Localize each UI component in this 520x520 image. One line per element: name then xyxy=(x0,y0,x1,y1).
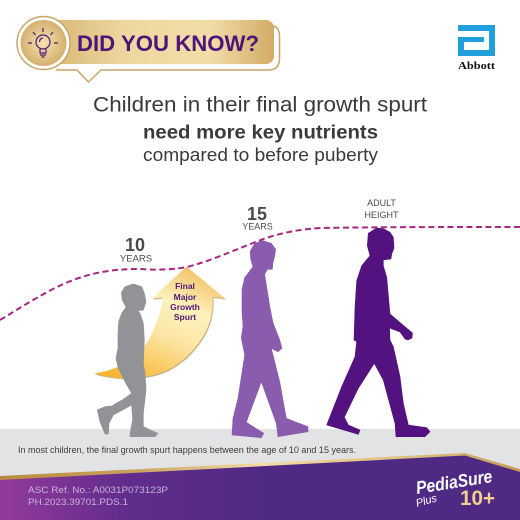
label: 15 years: YEARS xyxy=(242,222,273,232)
logo: Abbott xyxy=(458,25,496,72)
title line 3: compared to before puberty xyxy=(143,145,378,165)
arrow label xyxy=(170,281,200,322)
label: 10 years xyxy=(120,235,152,264)
label: 15 years xyxy=(242,204,273,232)
ground band xyxy=(0,429,520,520)
logo wordmark: Abbott xyxy=(458,61,496,72)
footnote: In most children, the final growth spurt happens between the age of 10 and 15 years. xyxy=(18,445,356,455)
silhouette: teen xyxy=(232,241,308,438)
logo: PediaSure Plus 10+: 10+ xyxy=(460,487,495,510)
gold stripe xyxy=(0,453,520,481)
arrow label: Final xyxy=(175,281,195,291)
growth curve dashed line xyxy=(0,227,520,320)
label: adult height: ADULT xyxy=(367,198,396,208)
label: adult height: HEIGHT xyxy=(364,210,399,220)
label: 10 years: YEARS xyxy=(120,254,152,264)
logo: PediaSure Plus 10+: Plus xyxy=(415,492,439,510)
silhouette: child xyxy=(97,284,158,437)
arrow label: Major xyxy=(174,292,197,302)
badge heading: DID YOU KNOW? xyxy=(77,31,259,56)
reference codes xyxy=(28,485,168,507)
logo: PediaSure Plus 10+: PediaSure xyxy=(414,466,494,498)
arrow label: Growth xyxy=(170,302,200,312)
label: 10 years: 10 xyxy=(125,235,145,255)
arrow label: Spurt xyxy=(174,312,196,322)
logo: PediaSure Plus 10+ xyxy=(414,466,495,510)
label: adult height xyxy=(364,198,399,220)
title xyxy=(93,92,427,165)
arrow: final major growth spurt xyxy=(94,267,226,379)
badge: did you know xyxy=(17,16,280,82)
badge gold pill xyxy=(50,20,274,64)
logo mark xyxy=(458,25,495,56)
label: 15 years: 15 xyxy=(247,204,267,224)
badge outline with tail xyxy=(56,26,280,82)
silhouette: adult xyxy=(327,228,430,437)
title line 1: Children in their final growth spurt xyxy=(93,92,427,116)
reference codes: ASC Ref. No.: A0031P073123P xyxy=(28,485,168,495)
title line 2: need more key nutrients xyxy=(143,122,378,144)
icon: light bulb xyxy=(17,16,70,70)
footer band xyxy=(0,453,520,520)
reference codes: PH.2023.39701.PDS.1 xyxy=(28,497,128,507)
arrow shape xyxy=(94,267,226,379)
purple panel xyxy=(0,456,520,520)
